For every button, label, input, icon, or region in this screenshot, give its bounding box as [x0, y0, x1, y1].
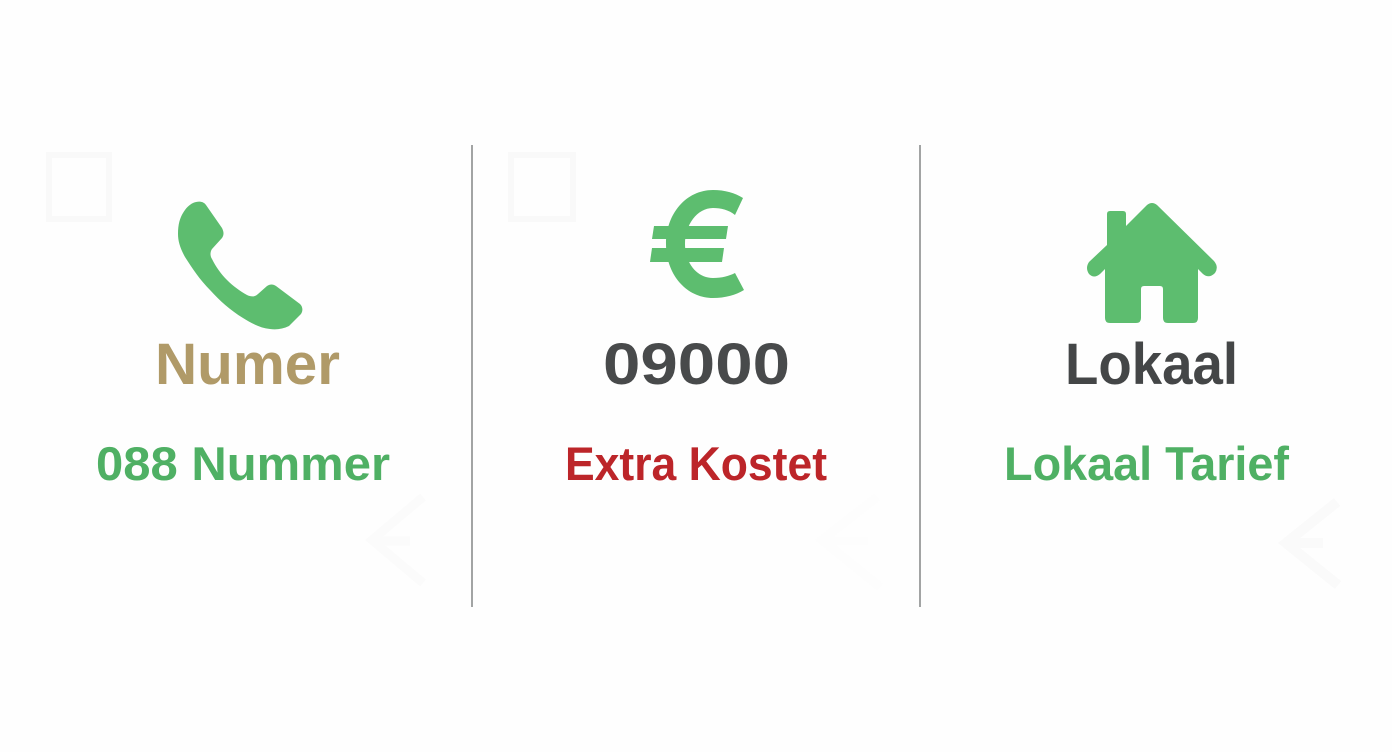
heading: Lokaal: Lokaal: [1065, 332, 1238, 397]
panel: 088 number: [49, 155, 423, 583]
faint arrow: [822, 497, 880, 587]
heading: Numer: Numer: [155, 332, 340, 397]
icon: house: [1087, 203, 1217, 323]
faint arrow: [372, 497, 423, 583]
label: Extra Kostet: Extra Kostet: [565, 437, 827, 490]
label: Lokaal Tarief: Lokaal Tarief: [1004, 437, 1289, 490]
heading: 09000: 09000: [603, 332, 790, 397]
icon: euro: [650, 190, 744, 298]
faint checkbox square: [511, 155, 573, 219]
label: 088 Nummer: 088 Nummer: [96, 437, 390, 490]
panel: 09000 number: [511, 155, 880, 587]
faint checkbox square: [49, 155, 109, 219]
panel: local number: [1004, 203, 1338, 585]
faint arrow: [1286, 502, 1338, 585]
icon: phone: [178, 202, 302, 329]
